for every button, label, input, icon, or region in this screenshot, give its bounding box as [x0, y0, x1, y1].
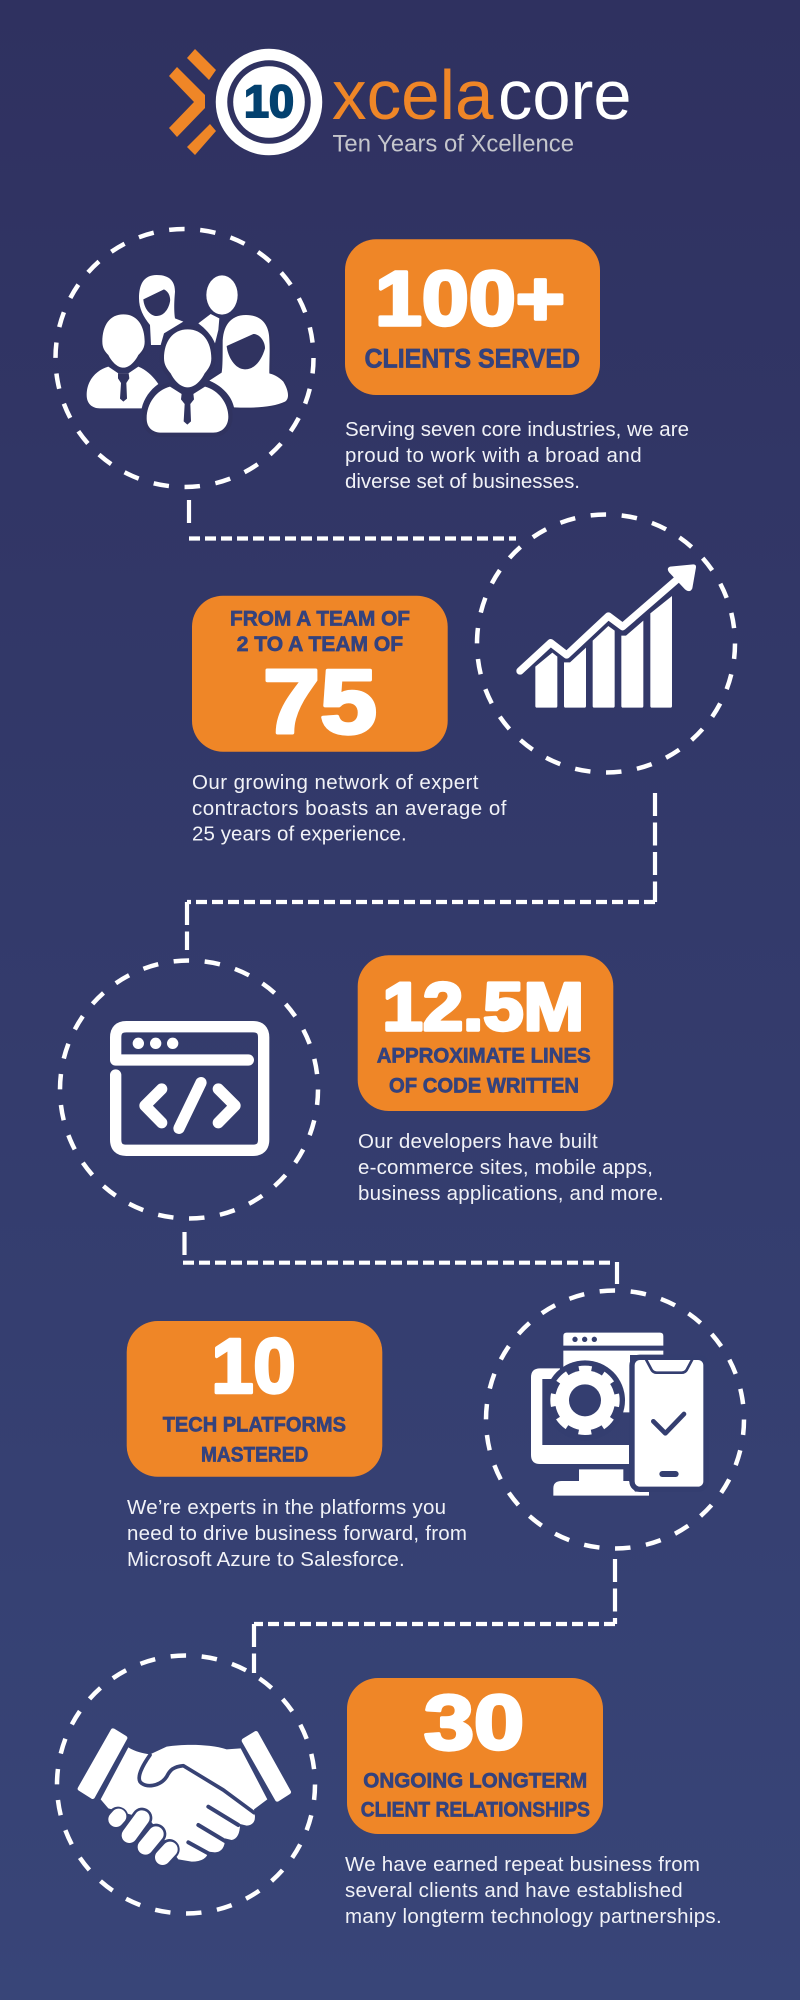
- stat: 75: 75: [263, 652, 377, 753]
- stat label: [377, 1044, 591, 1098]
- cuffs: [80, 1731, 125, 1797]
- stat label: [230, 607, 410, 656]
- icon: group of people: [87, 275, 288, 433]
- description: need to drive business forward, from: [127, 1522, 467, 1545]
- stat: 10: 10: [212, 1324, 296, 1410]
- stat: 100+: 100+: [375, 256, 565, 342]
- description: Microsoft Azure to Salesforce.: [127, 1548, 405, 1571]
- stat label: APPROXIMATE LINES: [377, 1044, 591, 1068]
- phone: [635, 1360, 703, 1487]
- panel: clients icon: [56, 229, 314, 487]
- brand name: core: [498, 56, 632, 134]
- hands: [101, 1745, 267, 1862]
- description: e-commerce sites, mobile apps,: [358, 1156, 653, 1179]
- back man: [206, 275, 238, 315]
- panel: tech platforms mastered: [127, 1321, 467, 1571]
- stat label: ONGOING LONGTERM: [363, 1769, 587, 1793]
- panel: team growth icon: [477, 514, 735, 772]
- stat: 30: 30: [424, 1680, 524, 1766]
- fist fingers: [116, 1816, 170, 1857]
- center man: [164, 329, 211, 387]
- description: [358, 1130, 664, 1205]
- gear: [545, 1360, 625, 1440]
- description: [192, 771, 507, 846]
- stat label: [163, 1413, 346, 1467]
- icon: orange chevrons: [169, 49, 216, 155]
- description: Serving seven core industries, we are: [345, 418, 689, 441]
- stat label: MASTERED: [201, 1443, 308, 1467]
- description: Our developers have built: [358, 1130, 598, 1153]
- stat label: [361, 1769, 590, 1822]
- tagline: Ten Years of Xcellence: [332, 131, 574, 158]
- icon: anniversary ring with 10: [222, 54, 316, 150]
- description: several clients and have established: [345, 1879, 683, 1902]
- logo header: [169, 49, 632, 158]
- stat label: CLIENT RELATIONSHIPS: [361, 1798, 590, 1822]
- description: Our growing network of expert: [192, 771, 479, 794]
- description: many longterm technology partnerships.: [345, 1905, 722, 1928]
- stat label: FROM A TEAM OF: [230, 607, 410, 631]
- icon: rising bar chart: [520, 564, 696, 708]
- description: [127, 1496, 467, 1571]
- icon: monitor, gear and phone: [531, 1333, 703, 1496]
- panel: clients served: [345, 239, 689, 493]
- left man: [102, 314, 145, 368]
- icon: code window: [116, 1027, 264, 1150]
- panel: lines of code: [358, 955, 664, 1205]
- thumb and clasp outline: [139, 1755, 254, 1813]
- connector: platforms to partnerships: [254, 1559, 615, 1673]
- description: [345, 1853, 722, 1928]
- stat label: 2 TO A TEAM OF: [237, 632, 403, 656]
- panel: partnerships icon: [57, 1656, 315, 1914]
- panel: team of 75: [192, 596, 507, 846]
- monitor: [531, 1368, 629, 1464]
- panel: longterm client relationships: [345, 1678, 722, 1928]
- brand name: xcela: [332, 56, 494, 134]
- panel: platforms icon: [486, 1290, 744, 1548]
- finger gaps: [188, 1807, 238, 1853]
- connector: code to platforms: [183, 1232, 617, 1284]
- connector: clients to team: [189, 500, 516, 538]
- panel: code icon: [60, 960, 318, 1218]
- back woman: [139, 275, 183, 345]
- icon: handshake: [80, 1731, 289, 1862]
- description: We’re experts in the platforms you: [127, 1496, 446, 1519]
- description: 25 years of experience.: [192, 823, 407, 846]
- description: diverse set of businesses.: [345, 470, 580, 493]
- description: [345, 418, 689, 493]
- icon: anniversary ring with 10: 10: [244, 76, 294, 127]
- stat: 12.5M: 12.5M: [382, 969, 584, 1045]
- stat label: TECH PLATFORMS: [163, 1413, 346, 1437]
- center man halo: [147, 329, 228, 433]
- front woman: [209, 315, 288, 408]
- stat label: OF CODE WRITTEN: [389, 1074, 579, 1098]
- description: proud to work with a broad and: [345, 444, 642, 467]
- description: business applications, and more.: [358, 1182, 664, 1205]
- connector: team to code: [187, 793, 655, 950]
- stat label: CLIENTS SERVED: [364, 344, 580, 374]
- description: We have earned repeat business from: [345, 1853, 700, 1876]
- browser window: [563, 1333, 663, 1346]
- description: contractors boasts an average of: [192, 797, 507, 820]
